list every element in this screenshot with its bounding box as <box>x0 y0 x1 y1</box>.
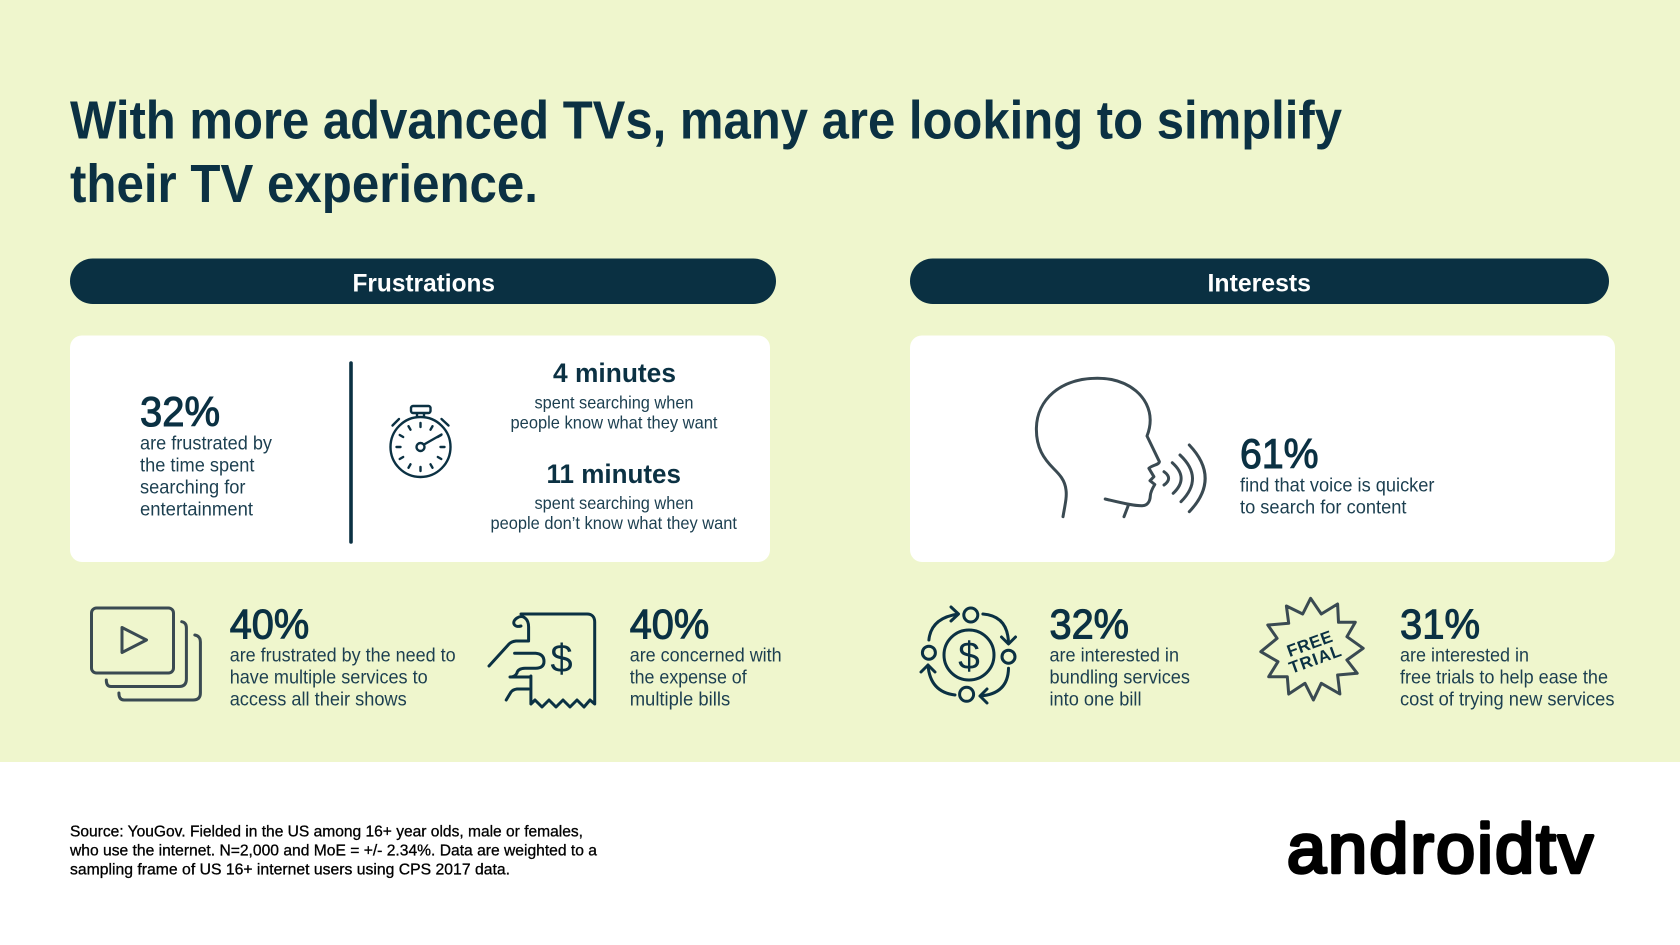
source note: who use the internet. N=2,000 and MoE = +/- 2.34%. Data are weighted to a <box>69 842 597 860</box>
stat: 4 minutes: people know what they want <box>510 412 718 432</box>
stat: 11 minutes: 11 minutes <box>546 459 681 489</box>
stat: 40% multiple services: access all their shows <box>230 689 407 711</box>
stat: 32% bundling: into one bill <box>1050 689 1142 711</box>
stat: 61% voice: to search for content <box>1240 497 1407 519</box>
icon: hand holding bill <box>489 614 595 707</box>
title: their TV experience. <box>70 154 538 214</box>
heading: Frustrations: Frustrations <box>352 270 495 298</box>
stat: 11 minutes <box>490 459 737 533</box>
dollar sign: $ <box>550 637 573 681</box>
stat: 40% expense of bills: multiple bills <box>630 689 730 711</box>
stat: 61% voice: 61% <box>1240 430 1318 477</box>
stat: 31% free trials: 31% <box>1400 600 1480 647</box>
stat: 4 minutes <box>510 358 718 432</box>
source note <box>69 824 597 878</box>
stat: 32% frustrated by time spent <box>140 388 272 521</box>
title <box>70 90 1342 214</box>
stat: 32% bundling: bundling services <box>1050 667 1190 689</box>
icon: free trial badge <box>1261 598 1363 700</box>
source note: Source: YouGov. Fielded in the US among 16+ year olds, male or females, <box>70 824 583 840</box>
stat: 32% bundling: 32% <box>1050 600 1129 647</box>
panel: interests card <box>910 336 1615 562</box>
heading: Frustrations <box>70 258 776 304</box>
stat: 11 minutes: spent searching when <box>534 493 694 513</box>
stat: 40% multiple services: have multiple services to <box>230 667 428 689</box>
source note: sampling frame of US 16+ internet users using CPS 2017 data. <box>70 862 510 878</box>
stat: 32% frustrated by time spent: are frustrated by <box>140 432 272 454</box>
icon: stopwatch <box>390 406 450 477</box>
stat: 61% voice <box>1240 430 1435 519</box>
stat: 32% frustrated by time spent: searching for <box>140 476 246 498</box>
stat: 31% free trials: cost of trying new services <box>1400 689 1615 711</box>
stat: 4 minutes: spent searching when <box>534 392 694 412</box>
panel: frustrations card <box>70 336 770 562</box>
stat: 31% free trials: free trials to help ease the <box>1400 667 1608 689</box>
dollar sign: $ <box>958 635 980 678</box>
stat: 40% multiple services: 40% <box>230 600 309 647</box>
divider <box>349 363 353 542</box>
stat: 32% frustrated by time spent: the time spent <box>140 454 255 476</box>
stat: 32% bundling: are interested in <box>1050 645 1179 667</box>
stat: 11 minutes: people don’t know what they want <box>490 513 737 533</box>
stat: 31% free trials: are interested in <box>1400 645 1529 667</box>
icon: free trial badge: FREE <box>1284 627 1335 661</box>
icon: stacked video screens <box>92 608 200 700</box>
icon: speaking head <box>1036 378 1205 517</box>
stat: 40% multiple services: are frustrated by the need to <box>230 645 456 667</box>
stat: 32% bundling <box>1050 600 1190 711</box>
title: With more advanced TVs, many are looking to simplify <box>70 90 1342 150</box>
icon: free trial badge: TRIAL <box>1287 641 1344 678</box>
logo: androidtv: androidtv <box>1287 810 1593 888</box>
stat: 4 minutes: 4 minutes <box>553 358 676 388</box>
stat: 40% expense of bills <box>630 600 782 711</box>
stat: 31% free trials <box>1400 600 1615 711</box>
heading: Interests <box>910 258 1609 304</box>
stat: 40% expense of bills: 40% <box>630 600 709 647</box>
heading: Interests: Interests <box>1208 270 1311 298</box>
stat: 40% expense of bills: are concerned with <box>630 645 782 667</box>
stat: 32% frustrated by time spent: entertainment <box>140 499 254 521</box>
stat: 40% multiple services <box>230 600 456 711</box>
stat: 32% frustrated by time spent: 32% <box>140 388 220 435</box>
icon: bundled services cycle <box>921 607 1016 703</box>
stat: 40% expense of bills: the expense of <box>630 667 747 689</box>
stat: 61% voice: find that voice is quicker <box>1240 475 1435 497</box>
